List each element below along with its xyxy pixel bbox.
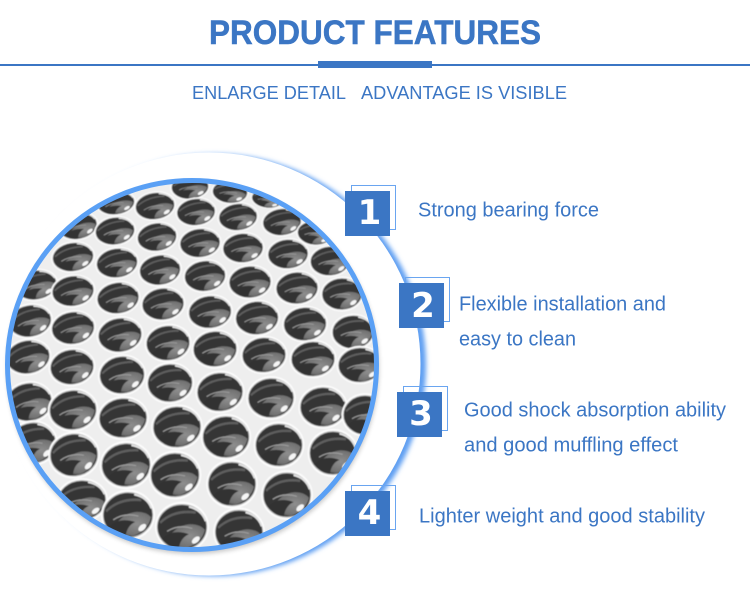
feature 4 <box>345 486 705 536</box>
feature 3: Good shock absorption ability <box>464 400 726 422</box>
circular photo: perforated metal plate <box>2 173 389 556</box>
feature 4: 4 <box>358 493 381 533</box>
feature 3: and good muffling effect <box>464 435 678 457</box>
header divider <box>0 61 750 68</box>
subtitle: ADVANTAGE IS VISIBLE <box>361 83 567 103</box>
feature 2: easy to clean <box>459 329 576 351</box>
feature 2: Flexible installation and <box>459 294 666 316</box>
feature 3 <box>397 386 726 457</box>
feature 2: 2 <box>411 286 435 326</box>
feature 4: Lighter weight and good stability <box>419 506 705 528</box>
subtitle <box>192 83 567 103</box>
feature 1 <box>345 186 599 236</box>
outer glowing arc <box>0 152 426 576</box>
feature 1: 1 <box>358 193 381 233</box>
feature 3: 3 <box>409 394 433 434</box>
feature 1: Strong bearing force <box>418 200 599 222</box>
feature 2 <box>399 278 666 351</box>
subtitle: ENLARGE DETAIL <box>192 83 346 103</box>
title: PRODUCT FEATURES <box>209 14 541 52</box>
